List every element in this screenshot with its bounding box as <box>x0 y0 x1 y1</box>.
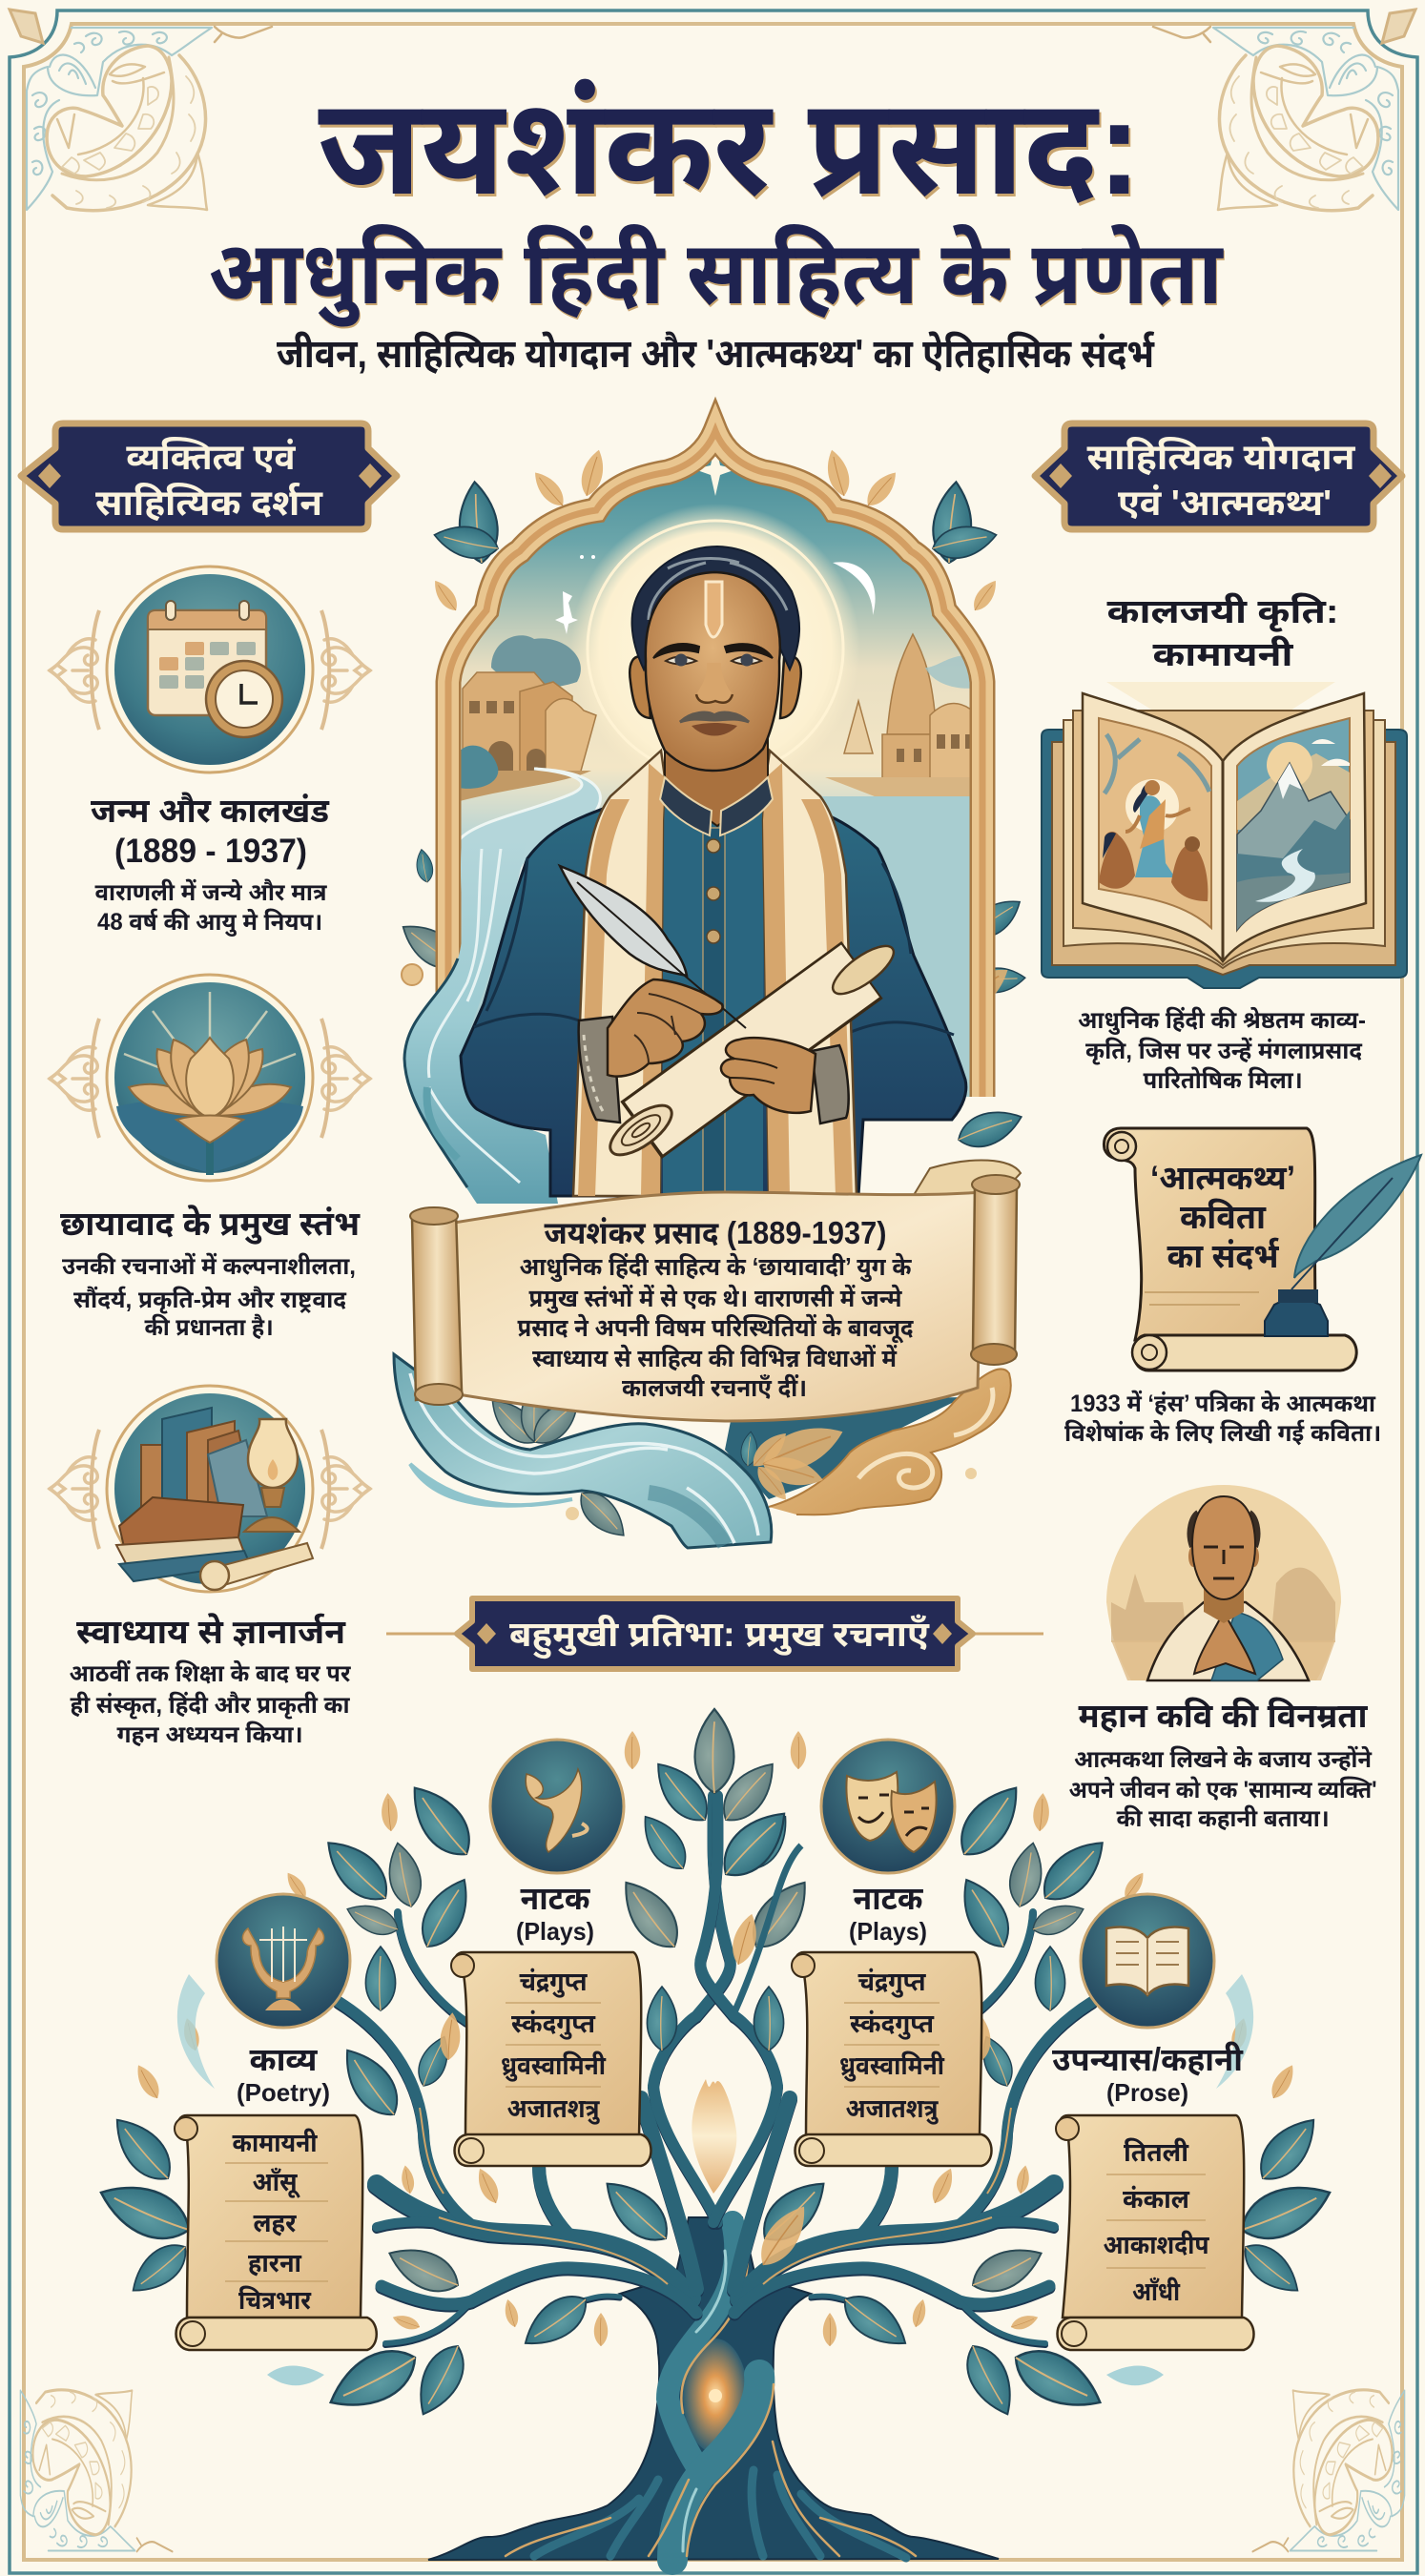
scroll heading: का संदर्भ <box>1167 1237 1279 1275</box>
text: chhayavad description: सौंदर्य, प्रकृति-प्रेम और राष्ट्रवाद <box>73 1286 347 1314</box>
label: plays left: (Plays) <box>516 1917 594 1946</box>
ears <box>630 656 801 718</box>
scroll: plays left works: चंद्रगुप्त <box>519 1968 589 1997</box>
corner ornament: bottom right <box>1252 2390 1405 2551</box>
label: prose: उपन्यास/कहानी <box>1052 2042 1244 2078</box>
coat <box>461 806 966 1196</box>
scroll: plays right works: चंद्रगुप्त <box>858 1968 927 1997</box>
icon: quill and scroll <box>490 1740 624 1873</box>
heading: masterpiece: कालजयी कृति: <box>1106 592 1339 632</box>
text: kamayani description <box>1078 1006 1366 1094</box>
tree: left branches and leaves <box>93 1731 731 2422</box>
scroll: plays right works: ध्रुवस्वामिनी <box>839 2051 945 2081</box>
subtitle: जीवन, साहित्यिक योगदान और 'आत्मकथ्य' का ऐतिहासिक संदर्भ <box>277 331 1155 376</box>
water and gold swirl beneath scroll <box>394 1354 1011 1548</box>
tree trunk and roots <box>428 2217 999 2560</box>
label: plays right: नाटक <box>853 1881 923 1917</box>
tree: right branches and leaves <box>700 1731 1338 2422</box>
scroll body text: कालजयी रचनाएँ दीं। <box>622 1373 807 1402</box>
heading: pillar of chhayavad: छायावाद के प्रमुख स्तंभ <box>60 1205 361 1245</box>
icon: open book <box>1081 1894 1214 2028</box>
scroll: plays left works <box>451 1952 651 2166</box>
neck <box>665 734 768 826</box>
years: (1889 - 1937) <box>114 833 307 870</box>
text: kamayani description: आधुनिक हिंदी की श्रेष्ठतम काव्य- <box>1078 1006 1366 1035</box>
text: humility description: आत्मकथा लिखने के बजाय उन्होंने <box>1074 1745 1373 1773</box>
text: birth description <box>95 878 327 937</box>
text: birth description: 48 वर्ष की आयु मे नियप। <box>97 908 322 937</box>
text: kamayani description: पारितोषिक मिला। <box>1143 1066 1303 1094</box>
scroll body text: आधुनिक हिंदी साहित्य के ‘छायावादी’ युग के <box>519 1252 912 1282</box>
left section banner: साहित्यिक दर्शन <box>95 482 323 524</box>
scroll: plays left works: ध्रुवस्वामिनी <box>501 2051 607 2081</box>
scroll body text: स्वाध्याय से साहित्य की विभिन्न विधाओं में <box>532 1344 898 1372</box>
feather <box>560 866 746 1028</box>
tree: top centre leaves and plays branch <box>646 1709 816 2274</box>
icon: calendar and clock <box>50 567 370 773</box>
text: self study description: गहन अध्ययन किया। <box>116 1721 303 1748</box>
panel: masterpiece kamayani <box>1042 592 1407 1094</box>
text: humility description <box>1068 1745 1377 1832</box>
scroll: prose works: तितली <box>1124 2138 1189 2167</box>
left clouds <box>491 635 581 688</box>
scroll body text: प्रमुख स्तंभों में से एक थे। वाराणसी में जन्मे <box>528 1284 902 1313</box>
title: जयशंकर प्रसाद: <box>319 72 1141 223</box>
illustration: poet in namaste <box>1106 1485 1341 1680</box>
left section banner: व्यक्तित्व एवं <box>126 436 296 478</box>
face <box>646 572 780 771</box>
left hand <box>608 979 723 1077</box>
river in the scene <box>460 769 600 887</box>
title <box>208 72 1224 327</box>
corner ornament: top left <box>27 27 272 211</box>
right section banner: साहित्यिक योगदान <box>1087 436 1355 478</box>
arch frame with scene <box>429 401 1002 1106</box>
text: humility description: की सादा कहानी बताया। <box>1116 1804 1330 1832</box>
title: आधुनिक हिंदी साहित्य के प्रणेता <box>208 224 1224 327</box>
text: chhayavad description: की प्रधानता है। <box>145 1313 273 1341</box>
left section banner <box>21 423 397 529</box>
corner ornament: bottom left <box>20 2390 173 2551</box>
text: poem context: विशेषांक के लिए लिखी गई कविता। <box>1064 1419 1381 1447</box>
scroll: plays right works: अजातशत्रु <box>845 2094 939 2124</box>
hair <box>632 546 799 670</box>
scroll heading: जयशंकर प्रसाद (1889-1937) <box>544 1215 887 1250</box>
branch: poetry <box>175 1894 377 2350</box>
scroll: plays left works: स्कंदगुप्त <box>511 2009 596 2039</box>
panel: self study <box>50 1386 370 1748</box>
panel: humility of the poet <box>1068 1485 1377 1832</box>
label: poetry <box>237 2042 330 2107</box>
branch: plays left <box>451 1740 651 2166</box>
heading: masterpiece <box>1106 592 1339 673</box>
icon: books and lamp <box>50 1386 370 1592</box>
left city <box>463 672 596 774</box>
scroll: plays right works: स्कंदगुप्त <box>850 2009 935 2039</box>
illustration: open book <box>1042 682 1407 988</box>
text: humility description: अपने जीवन को एक 'सामान्य व्यक्ति' <box>1068 1776 1377 1803</box>
heading: self study: स्वाध्याय से ज्ञानार्जन <box>76 1613 346 1651</box>
label: prose: (Prose) <box>1106 2078 1188 2107</box>
text: self study description: आठवीं तक शिक्षा के बाद घर पर <box>69 1659 351 1687</box>
scroll: prose works: आँधी <box>1132 2277 1181 2306</box>
left picture <box>1099 718 1211 928</box>
scroll heading: कविता <box>1180 1198 1267 1236</box>
central portrait panel <box>394 401 1027 1548</box>
label: plays right: (Plays) <box>849 1917 927 1946</box>
scroll body text <box>517 1252 914 1402</box>
label: poetry: काव्य <box>250 2042 318 2078</box>
scarf <box>573 751 665 1196</box>
scroll: prose works: आकाशदीप <box>1103 2231 1210 2259</box>
heading: humility: महान कवि की विनम्रता <box>1078 1697 1368 1735</box>
scroll: poetry works: चित्रभार <box>238 2286 312 2315</box>
scroll heading <box>1150 1160 1295 1275</box>
panel: atmakathya poem context <box>1064 1128 1421 1447</box>
section banner: major works: बहुमुखी प्रतिभा: प्रमुख रचनाएँ <box>509 1614 931 1659</box>
scroll: plays right works <box>792 1952 992 2166</box>
label: plays left <box>516 1881 594 1946</box>
branch: prose <box>1052 1894 1253 2350</box>
heading: masterpiece: कामायनी <box>1152 635 1293 673</box>
scroll: prose works <box>1056 2115 1253 2350</box>
right hand <box>721 1038 816 1113</box>
text: birth description: वाराणली में जन्ये और मात्र <box>95 878 327 906</box>
icon: lotus <box>50 975 370 1181</box>
right temples <box>843 633 969 777</box>
scroll: poetry works: लहर <box>254 2209 298 2237</box>
text: poem context: 1933 में ‘हंस’ पत्रिका के आत्मकथा <box>1070 1390 1376 1417</box>
text: chhayavad description <box>62 1252 356 1341</box>
scroll in hands <box>641 970 862 1130</box>
scroll: poetry works <box>175 2115 377 2350</box>
name scroll <box>410 1160 1021 1421</box>
scroll: poetry works: कामायनी <box>233 2129 318 2157</box>
tree of works <box>93 1709 1338 2560</box>
right section banner <box>1035 423 1402 529</box>
label: plays right <box>849 1881 927 1946</box>
kurta front <box>663 801 763 1196</box>
branch: plays right <box>792 1740 992 2166</box>
text: kamayani description: कृति, जिस पर उन्हें मंगलाप्रसाद <box>1085 1037 1363 1065</box>
scroll: poetry works: हारना <box>248 2249 302 2277</box>
corner ornament: top right <box>1153 27 1398 211</box>
flowing river left of portrait <box>404 839 558 1204</box>
right cuff <box>812 1045 849 1123</box>
scroll: poetry works: आँसू <box>252 2167 300 2198</box>
text: self study description <box>69 1659 351 1748</box>
icon: theatre masks <box>821 1740 955 1873</box>
panel: chhayavad pillar <box>50 975 370 1341</box>
text: self study description: ही संस्कृत, हिंदी और प्राकृती का <box>71 1691 350 1720</box>
text: chhayavad description: उनकी रचनाओं में कल्पनाशीलता, <box>62 1252 356 1280</box>
scroll body text: प्रसाद ने अपनी विषम परिस्थितियों के बावजूद <box>517 1313 914 1344</box>
scroll: plays left works: अजातशत्रु <box>507 2094 600 2124</box>
scroll: prose works: कंकाल <box>1123 2185 1190 2214</box>
portrait: poet <box>461 546 966 1196</box>
illustration: scroll with feather and inkpot <box>1104 1128 1421 1370</box>
label: plays left: नाटक <box>521 1881 590 1917</box>
left cuff <box>579 1017 620 1123</box>
heading: birth and period: जन्म और कालखंड <box>91 792 330 830</box>
tree: left-only leaf <box>333 2040 409 2125</box>
decorative leaves around the arch <box>394 447 1027 1154</box>
right section banner: एवं 'आत्मकथ्य' <box>1118 484 1332 524</box>
tilak <box>706 582 722 637</box>
label: poetry: (Poetry) <box>237 2078 330 2107</box>
text: poem context <box>1064 1390 1381 1447</box>
icon: lyre <box>217 1894 350 2028</box>
section banner: major works <box>386 1598 1043 1669</box>
scroll heading: ‘आत्मकथ्य’ <box>1150 1160 1295 1197</box>
panel: birth and period <box>50 567 370 937</box>
label: prose <box>1052 2042 1244 2107</box>
right picture <box>1237 718 1350 930</box>
